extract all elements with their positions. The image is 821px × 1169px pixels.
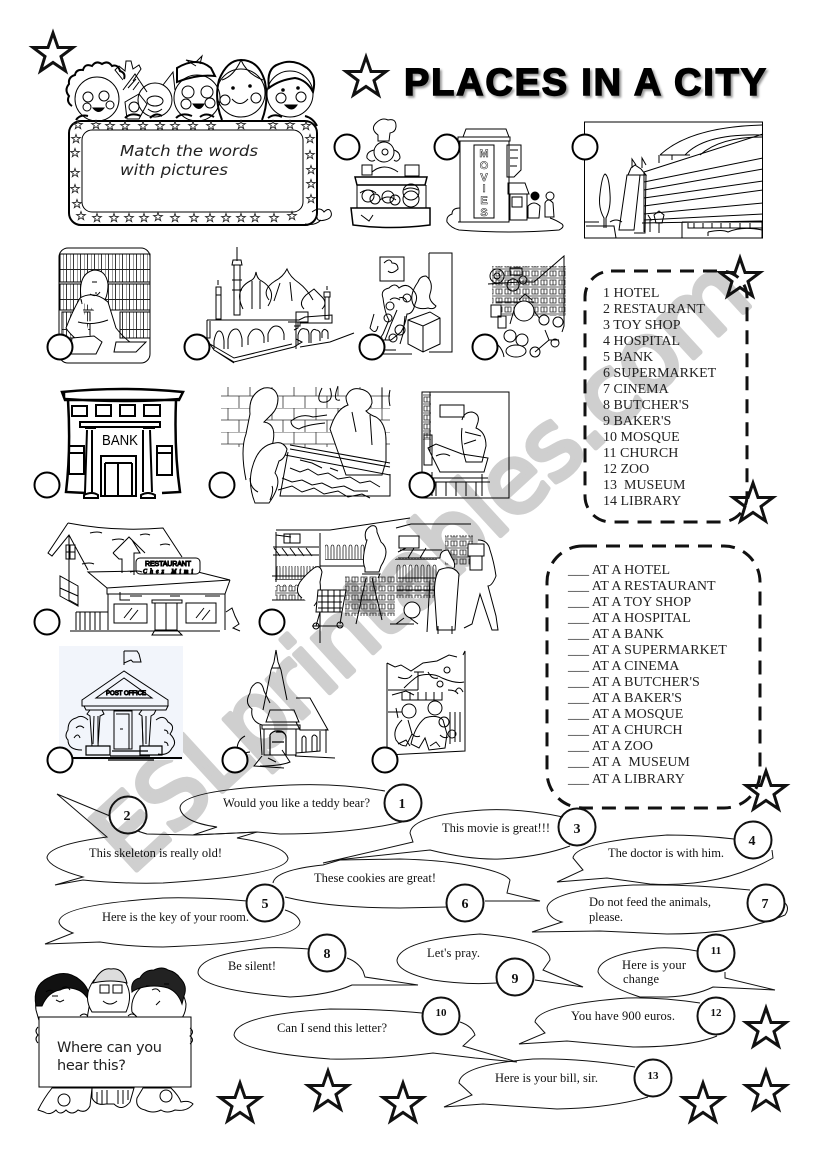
speech bubble 6: 6 bbox=[462, 897, 468, 912]
speech bubble 11: Here is your bbox=[622, 958, 687, 972]
speech bubble 10 bbox=[234, 998, 517, 1062]
place list text: ___ AT A RESTAURANT bbox=[567, 579, 716, 594]
place list text: ___ AT A BUTCHER'S bbox=[567, 675, 700, 690]
icon: toy shop bbox=[488, 256, 566, 357]
speech bubble 11: 11 bbox=[711, 945, 721, 957]
speech bubble 12 bbox=[519, 998, 734, 1047]
band of small stars bbox=[71, 120, 315, 222]
marquee frame bbox=[69, 121, 317, 225]
speech bubble 2 bbox=[47, 794, 288, 885]
icon: cinema building: I bbox=[482, 183, 486, 195]
speech bubble 3: This movie is great!!! bbox=[442, 821, 550, 835]
word list text: 5 BANK bbox=[603, 350, 653, 365]
speech bubble 3: 3 bbox=[574, 822, 580, 837]
speech bubble 8 bbox=[198, 934, 418, 997]
place list text: ___ AT A BAKER'S bbox=[567, 691, 682, 706]
speech bubble 1: 1 bbox=[398, 797, 406, 812]
place list text: ___ AT A ZOO bbox=[567, 739, 653, 754]
speech bubble 10: 10 bbox=[436, 1007, 447, 1019]
panel: numbered word list bbox=[585, 271, 747, 522]
speech bubble 4: 4 bbox=[748, 834, 756, 849]
speech bubble 6: These cookies are great! bbox=[314, 871, 436, 885]
speech bubble 4 bbox=[557, 822, 773, 884]
speech bubble 7 bbox=[532, 884, 788, 934]
bottom children holding sign: hear this? bbox=[57, 1058, 126, 1074]
watermark: ESLprintables.com bbox=[71, 237, 771, 893]
place list text: ___ AT A MOSQUE bbox=[567, 707, 683, 722]
place list text: ___ AT A CINEMA bbox=[567, 659, 680, 674]
place list text: ___ AT A SUPERMARKET bbox=[567, 643, 727, 658]
icon: church bbox=[237, 650, 335, 768]
speech bubble 11 bbox=[598, 934, 775, 997]
word list text: 10 MOSQUE bbox=[603, 430, 680, 445]
title: PLACES IN A CITY bbox=[404, 62, 766, 104]
answer circles bbox=[34, 134, 598, 772]
speech bubble 5: 5 bbox=[262, 897, 268, 912]
place list text: ___ AT A LIBRARY bbox=[567, 772, 685, 787]
word list text: 7 CINEMA bbox=[603, 382, 670, 397]
speech bubble 8: Be silent! bbox=[228, 959, 276, 973]
place list text: ___ AT A BANK bbox=[567, 627, 664, 642]
word list text bbox=[603, 286, 717, 509]
speech bubble 9: 9 bbox=[512, 972, 518, 987]
speech bubble 4: The doctor is with him. bbox=[608, 846, 724, 860]
icon: supermarket bbox=[272, 518, 498, 643]
icon: cinema building: V bbox=[480, 172, 488, 184]
icon: cinema building: E bbox=[480, 195, 488, 207]
icon: bank bbox=[62, 389, 183, 498]
word list text: 12 ZOO bbox=[603, 462, 649, 477]
instruction text: Match the words bbox=[120, 142, 258, 160]
speech bubble 1: Would you like a teddy bear? bbox=[223, 796, 370, 810]
speech bubble 12: 12 bbox=[710, 1007, 722, 1019]
word list text: 4 HOSPITAL bbox=[603, 334, 680, 349]
speech bubble 5 bbox=[45, 884, 300, 947]
icon: library with woman bbox=[59, 248, 150, 363]
word list text: 13 MUSEUM bbox=[603, 478, 686, 493]
icon: museum with skeleton bbox=[370, 253, 452, 354]
icon: cinema building: S bbox=[480, 207, 488, 219]
bottom children holding sign bbox=[35, 968, 193, 1114]
speech bubble 3 bbox=[323, 808, 596, 863]
icon: cinema building bbox=[447, 129, 563, 232]
speech bubble 10: Can I send this letter? bbox=[277, 1021, 387, 1035]
word list text: 8 BUTCHER'S bbox=[603, 398, 689, 413]
word list text: 6 SUPERMARKET bbox=[603, 366, 717, 381]
word list text: 3 TOY SHOP bbox=[603, 318, 681, 333]
place list text: ___ AT A HOSPITAL bbox=[567, 611, 691, 626]
icon: restaurant: Chez Mimi bbox=[143, 569, 193, 575]
children heads bbox=[35, 968, 186, 1024]
speech bubble 9 bbox=[397, 934, 583, 996]
speech bubble 13: Here is your bill, sir. bbox=[495, 1071, 598, 1085]
word list text: 14 LIBRARY bbox=[603, 494, 681, 509]
speech bubble 5: Here is the key of your room. bbox=[102, 910, 249, 924]
children heads bbox=[66, 56, 317, 126]
place list text bbox=[567, 563, 727, 787]
icon: cinema building: O bbox=[480, 160, 489, 172]
icon: post office bbox=[66, 651, 182, 760]
sign text: Where can you bbox=[57, 1040, 162, 1056]
feet bbox=[38, 1088, 193, 1114]
place list text: ___ AT A MUSEUM bbox=[567, 755, 690, 770]
speech bubble 2: 2 bbox=[124, 809, 130, 824]
panel: at a place list bbox=[547, 546, 760, 808]
decorative frame with children and instruction: with pictures bbox=[120, 161, 228, 179]
icon: restaurant bbox=[48, 523, 240, 635]
icon: hotel building bbox=[584, 122, 763, 238]
panel: post office background bbox=[59, 646, 183, 760]
icon: post office: POST OFFICE bbox=[106, 691, 146, 697]
place list text: ___ AT A HOTEL bbox=[567, 563, 670, 578]
word list text: 2 RESTAURANT bbox=[603, 302, 705, 317]
decorative frame with children and instruction bbox=[66, 56, 331, 225]
place list text: ___ AT A CHURCH bbox=[567, 723, 682, 738]
speech bubble 7: please. bbox=[589, 910, 623, 924]
icon: restaurant: RESTAURANT bbox=[145, 561, 192, 568]
speech bubble 12: You have 900 euros. bbox=[571, 1009, 675, 1023]
speech bubble 11: change bbox=[623, 972, 659, 986]
word list text: 1 HOTEL bbox=[603, 286, 659, 301]
icon: cinema building: M bbox=[479, 148, 489, 160]
place list text: ___ AT A TOY SHOP bbox=[567, 595, 691, 610]
icon: butcher's shop bbox=[221, 386, 390, 503]
speech bubble 7: 7 bbox=[762, 897, 768, 912]
icon: hospital bbox=[422, 392, 509, 498]
speech bubble 7: Do not feed the animals, bbox=[589, 895, 711, 909]
speech bubble 6 bbox=[273, 859, 540, 922]
icon: mosque bbox=[206, 247, 354, 363]
speech bubble 13: 13 bbox=[648, 1070, 659, 1082]
sign board bbox=[39, 1017, 191, 1087]
speech bubble 2: This skeleton is really old! bbox=[89, 846, 222, 860]
icon: bank: BANK bbox=[102, 432, 138, 449]
speech bubble 8: 8 bbox=[324, 947, 330, 962]
word list text: 9 BAKER'S bbox=[603, 414, 671, 429]
speech bubble 1 bbox=[180, 784, 422, 835]
icon: baker's shop bbox=[351, 119, 430, 228]
speech bubble 9: Let's pray. bbox=[427, 946, 480, 960]
word list text: 11 CHURCH bbox=[603, 446, 678, 461]
speech bubble 13 bbox=[444, 1059, 672, 1109]
icon: zoo bbox=[387, 651, 465, 755]
